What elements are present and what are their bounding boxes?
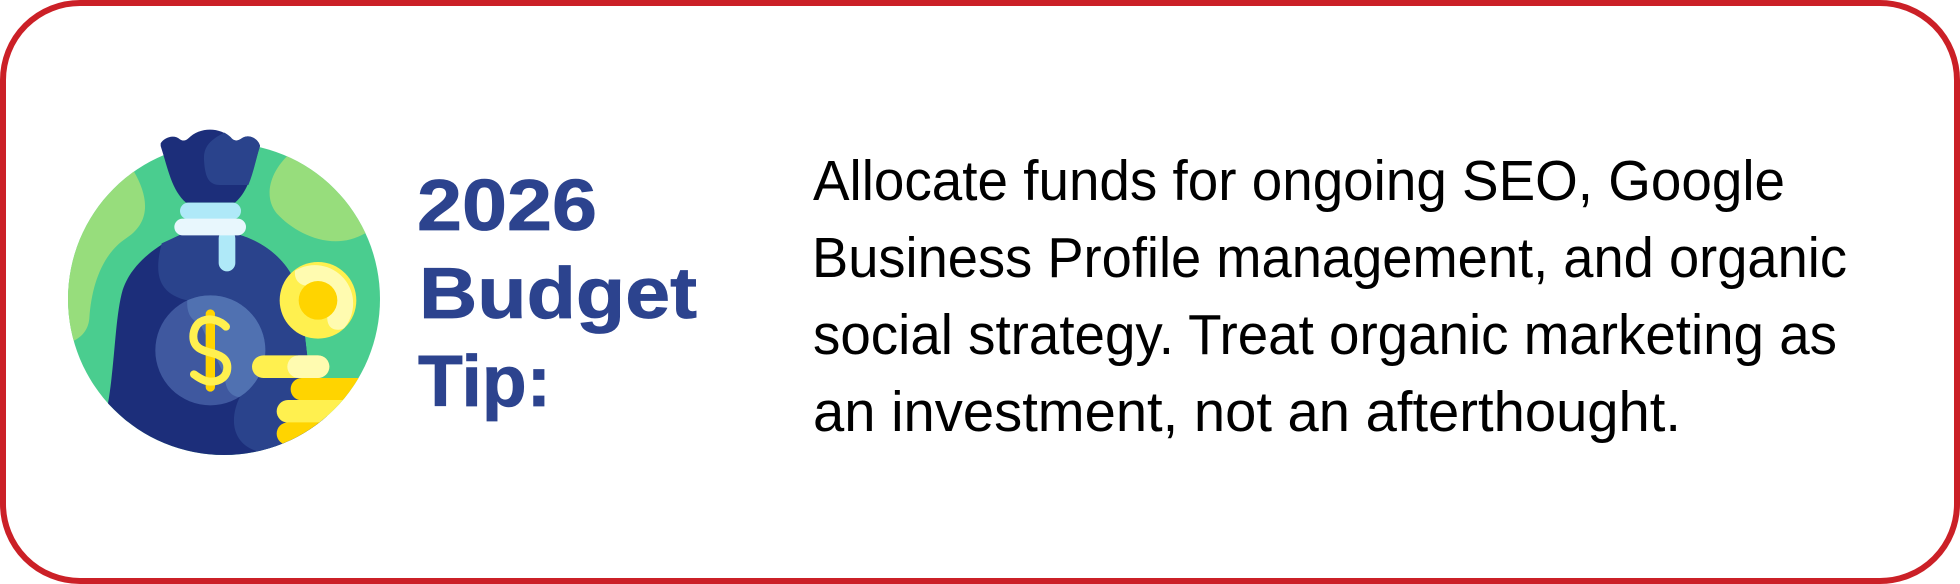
heading: 2026 Budget Tip: Tip: xyxy=(418,342,551,422)
heading: 2026 Budget Tip: 2026 xyxy=(417,166,597,246)
text block: budget tip body: an investment, not an afterthought. xyxy=(813,380,1681,444)
heading: 2026 Budget Tip xyxy=(417,166,697,422)
text block: budget tip body xyxy=(812,149,1847,444)
icon: money bag with coins xyxy=(68,130,380,455)
text block: budget tip body: social strategy. Treat organic marketing as xyxy=(813,303,1837,367)
heading: 2026 Budget Tip: Budget xyxy=(419,254,697,334)
text block: budget tip body: Business Profile management, and organic xyxy=(812,226,1847,290)
text block: budget tip body: Allocate funds for ongoing SEO, Google xyxy=(813,149,1785,213)
